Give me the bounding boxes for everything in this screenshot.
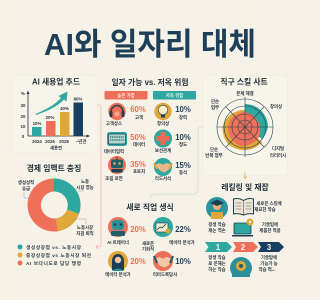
- arrow: gold connector: [244, 172, 246, 178]
- tag: high risk: 높은 가힘: [117, 92, 135, 99]
- stat: leadership 15%: 리드서석: [155, 175, 171, 182]
- stat: creativity 10%: [157, 105, 191, 127]
- title: AI와 일자리 대체: [44, 27, 256, 62]
- stat: data entry 50%: 50%: [130, 133, 146, 142]
- legend: [18, 244, 91, 267]
- bar chart: adoption: 0: [22, 134, 25, 139]
- text: step 3: 기술탐에: [261, 254, 277, 261]
- stat: assembly 35%: 포토치: [133, 168, 145, 175]
- donut labels: 시장 영능: [76, 184, 94, 190]
- stat: data analyst 22%: [169, 225, 195, 246]
- panel: AI adoption trend: [12, 76, 98, 152]
- heading: reskilling: 레킬링 및 재잡: [221, 182, 269, 192]
- process chevrons: 1: [216, 243, 221, 252]
- stat: assembly 35%: [105, 160, 146, 181]
- arrow: coral connector: [96, 105, 101, 249]
- text: step 1: 로 운해는: [208, 260, 226, 267]
- text: step 3: [258, 254, 278, 273]
- icon: laptop with gear: [232, 218, 254, 236]
- radar labels: 문제 해결: [236, 90, 254, 97]
- icon: customer service headset: [108, 103, 126, 120]
- label: new opportunity: 기회직: [142, 246, 154, 252]
- text: step 1: 평생 학습: [208, 254, 226, 261]
- text: lifelong: 제는 역손: [208, 227, 226, 234]
- heading: skill chart: 직구 스킬 사트: [220, 76, 268, 86]
- process chevrons: 2: [241, 243, 246, 252]
- bar chart: adoption: 60%: [74, 96, 82, 102]
- stat: creativity 10%: 창력: [179, 114, 187, 121]
- stat: analyst 20%: 테이터 분석가: [105, 271, 131, 278]
- bar chart: adoption: 2024: [32, 139, 42, 144]
- stat: partner 10%: 리미드록담사: [153, 271, 177, 278]
- stat: assembly 35%: 조립 로전: [105, 175, 123, 181]
- bar chart: adoption: 10: [21, 124, 26, 129]
- bar chart: adoption: 40%: [60, 106, 69, 111]
- donut labels: 노동: [81, 179, 89, 184]
- bar chart: adoption: 10%: [33, 121, 41, 126]
- stat: data analyst 22%: 테이터 분석가: [169, 239, 195, 246]
- stat: customer service 60%: 고객상스: [106, 120, 122, 127]
- radar labels: 창의성: [270, 103, 282, 110]
- bar chart: adoption: %: [21, 91, 25, 96]
- bar chart: adoption: 20: [21, 114, 26, 119]
- donut chart: [28, 178, 81, 231]
- heading: new jobs: 새로 직업 생식: [126, 202, 174, 212]
- label: new opportunity: 새로운: [142, 240, 154, 247]
- bar chart: adoption: 20%: [46, 115, 54, 120]
- panel: economic impact: [18, 163, 94, 267]
- bar chart: adoption: 2026: [45, 139, 55, 144]
- stat: data entry 50%: 데이터입력: [104, 148, 124, 155]
- legend: AI 브다니도로 담당 행명: [26, 260, 81, 267]
- icon: handshake: [154, 158, 172, 176]
- icon: handshake partner: [153, 251, 173, 271]
- text: new skills: [254, 200, 282, 213]
- legend: 생성성장점 vs. 노동시장: [26, 244, 82, 251]
- stat: AI trainer 20%: AI 트레이너: [107, 239, 129, 246]
- icon: medical cross: [154, 130, 172, 148]
- stat: analyst 20%: [105, 257, 146, 278]
- label: new opportunity: [142, 240, 154, 252]
- text: lifelong: 평생 학습: [208, 221, 226, 228]
- radar labels: 반복 업무: [205, 152, 223, 159]
- radar labels: 리터러시: [270, 152, 286, 159]
- text: step 3: 학습 적...: [258, 266, 276, 273]
- donut labels: 노동시장: [77, 224, 93, 230]
- stat: data analyst 22%: 22%: [175, 225, 191, 234]
- heading: economic impact: 경제 임팩트 충징: [27, 163, 81, 173]
- icon: keyboard: [107, 132, 127, 146]
- icon: head with gear: [230, 257, 252, 277]
- text: step 1: [208, 254, 226, 273]
- text: step 1: 하는 학습: [208, 266, 226, 273]
- stat: care 10%: 10%: [175, 133, 191, 142]
- stat: assembly 35%: 35%: [130, 160, 146, 169]
- stat: leadership 15%: 15%: [175, 161, 191, 170]
- text: step 3: 기능가 능: [260, 260, 278, 267]
- donut labels: 생성성적: [18, 179, 34, 186]
- stat: leadership 15%: 동석: [179, 169, 187, 176]
- donut labels: [18, 179, 94, 237]
- stat: AI trainer 20%: 20%: [130, 225, 146, 234]
- text: tech skills: [259, 221, 281, 234]
- bar chart: adoption: ~년견: [76, 138, 86, 144]
- donut labels: 승급: [22, 185, 30, 191]
- text: tech skills: 제품한 적용: [259, 227, 281, 234]
- stat: partner 10%: 10%: [175, 257, 191, 266]
- stat: data entry 50%: 데이터: [133, 141, 145, 148]
- donut labels: 지원 퇴직: [76, 230, 94, 237]
- bar chart: adoption: [21, 90, 90, 152]
- process chevrons: [205, 242, 284, 252]
- panel: jobs automatable vs low risk: [104, 77, 196, 182]
- radar labels: 디지털: [272, 145, 284, 152]
- text: new skills: 새로운 스킬에: [256, 200, 282, 207]
- icon: analyst woman: [108, 251, 128, 271]
- stat: care 10%: [155, 133, 191, 154]
- stat: analyst 20%: 20%: [130, 257, 146, 266]
- arrow: upward trend: [36, 92, 68, 115]
- stat: care 10%: 정도: [179, 141, 187, 147]
- icon: graduate: [206, 197, 228, 219]
- radar labels: 업무: [211, 104, 219, 111]
- legend: 중장성장점 vs 노동시장 퇴전: [26, 252, 91, 259]
- stat: AI trainer 20%: [107, 225, 146, 246]
- stat: partner 10%: [153, 257, 191, 278]
- bar chart: adoption: 30: [21, 103, 26, 108]
- tag: low risk: 저옥 위험: [166, 92, 183, 99]
- icon: assembly robot: [108, 156, 126, 174]
- stat: leadership 15%: [155, 161, 191, 182]
- stat: care 10%: 보선관계: [155, 147, 171, 154]
- radar chart: [217, 97, 273, 157]
- icon: robot trainer: [108, 217, 128, 237]
- panel: skill chart: [202, 76, 288, 176]
- heading: jobs at risk: 일자 가능 vs. 저옥 위험: [112, 77, 188, 87]
- stat: data entry 50%: [104, 133, 146, 155]
- stat: creativity 10%: 10%: [175, 105, 191, 114]
- arrow: teal connector: [150, 127, 204, 199]
- panel: new jobs: [105, 202, 195, 278]
- stat: customer service 60%: 60%: [130, 105, 146, 114]
- bar chart: adoption: 새용연: [50, 144, 62, 152]
- text: tech skills: 기술팀에: [262, 221, 278, 228]
- heading: AI adoption trend: AI 새용업 추드: [32, 76, 80, 86]
- icon: lightbulb creativity: [154, 103, 172, 120]
- stat: customer service 60%: 고객: [135, 114, 143, 121]
- icon: open book: [234, 198, 254, 215]
- text: lifelong: [208, 221, 226, 234]
- radar labels: 단순: [210, 146, 218, 152]
- radar labels: 단순: [211, 98, 219, 104]
- bar chart: adoption: 2028: [59, 139, 69, 144]
- panel: reskilling: [205, 182, 284, 277]
- stat: creativity 10%: 창의성: [157, 120, 169, 127]
- radar labels: [205, 90, 286, 159]
- text: new skills: 재요한 학습: [254, 206, 276, 213]
- process chevrons: 3: [267, 243, 272, 252]
- stat: customer service 60%: [106, 105, 146, 127]
- icon: data analyst chart: [153, 217, 173, 237]
